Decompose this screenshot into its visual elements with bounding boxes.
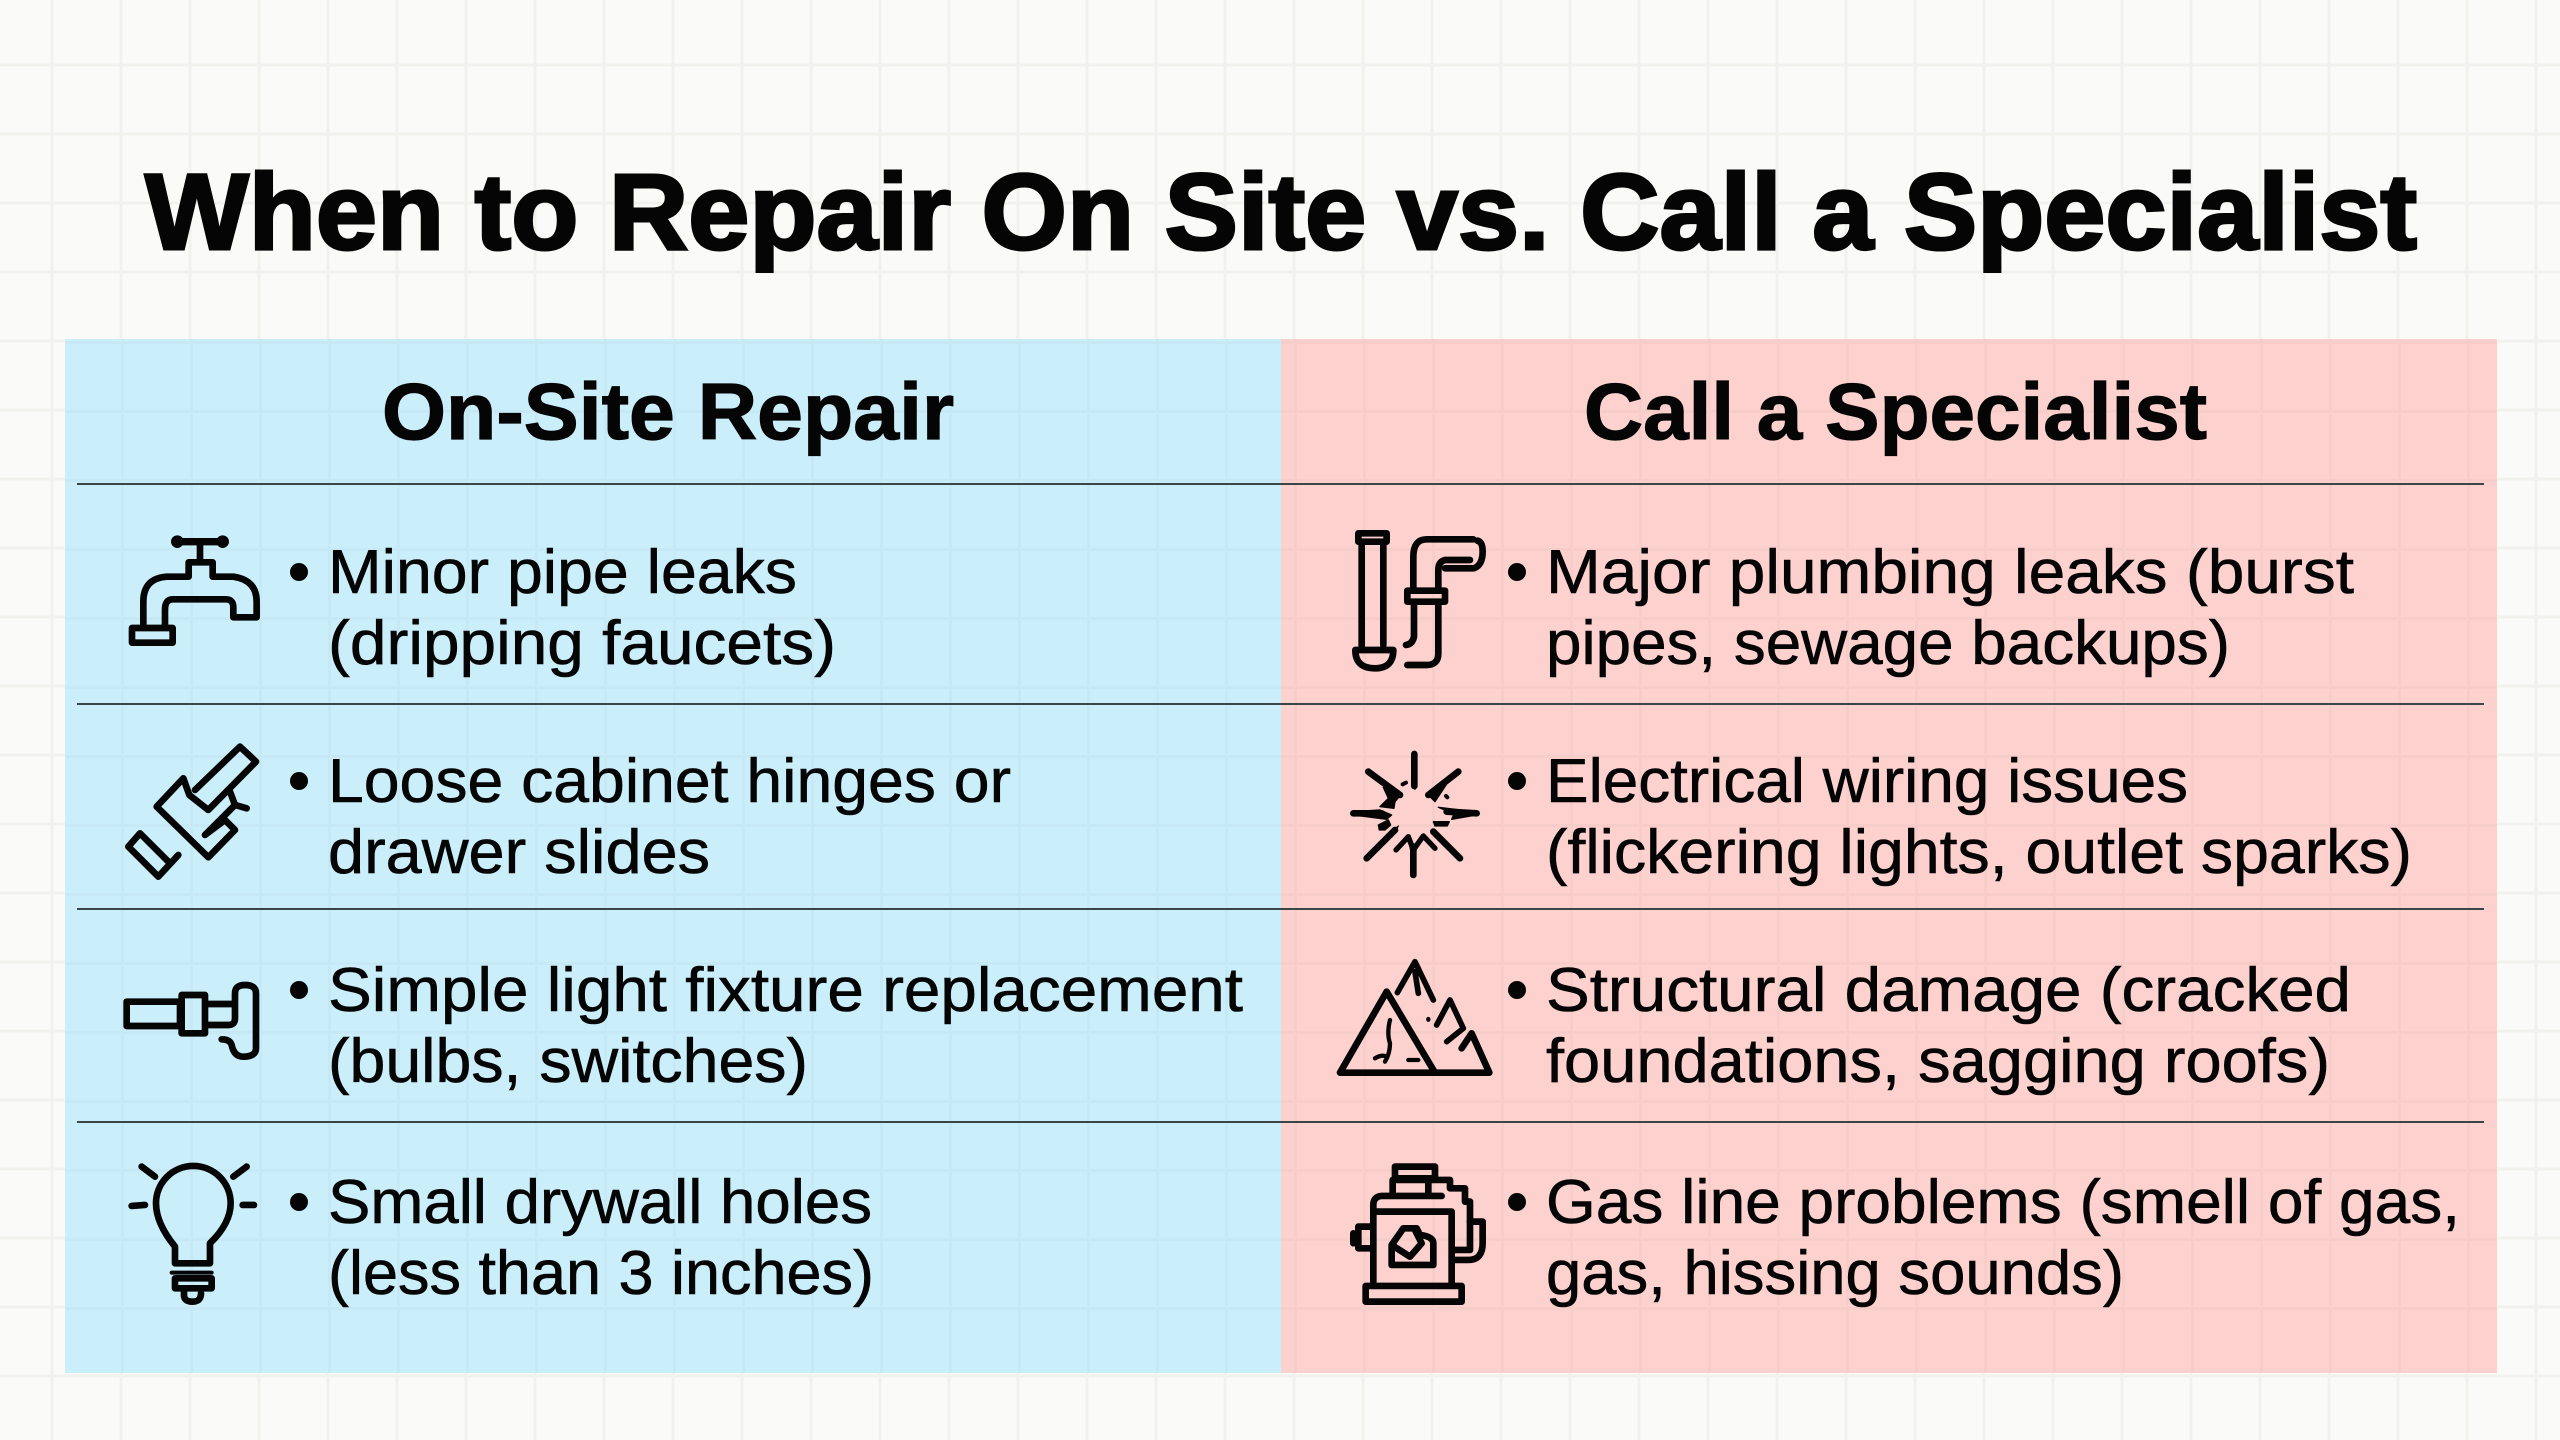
text block: right row 4 bbox=[1508, 1168, 2460, 1308]
text block: left row 2: Loose cabinet hinges or bbox=[328, 747, 1011, 816]
icon: light bulb bbox=[132, 1166, 254, 1302]
text block: right row 2: (flickering lights, outlet sparks) bbox=[1546, 818, 2412, 887]
text block: left row 1: Minor pipe leaks bbox=[328, 538, 797, 607]
heading: call a specialist: Call a Specialist bbox=[1584, 367, 2207, 456]
panel: on-site repair background bbox=[65, 339, 1281, 1373]
text block: left row 3: (bulbs, switches) bbox=[328, 1027, 808, 1096]
text block: right row 1: Major plumbing leaks (burst bbox=[1546, 538, 2354, 607]
text block: left row 2: drawer slides bbox=[328, 818, 710, 887]
row dividers bbox=[77, 484, 2484, 1122]
text block: right row 3: Structural damage (cracked bbox=[1546, 956, 2351, 1025]
text block: left row 1 bbox=[290, 538, 836, 678]
title: When to Repair On Site vs. Call a Specialist bbox=[145, 151, 2417, 272]
text block: left row 4: (less than 3 inches) bbox=[328, 1239, 874, 1308]
icon: cracked structure bbox=[1340, 962, 1489, 1073]
icon: light fixture bbox=[127, 985, 256, 1057]
heading: on-site repair: On-Site Repair bbox=[382, 367, 954, 456]
icon: pipes bbox=[1355, 533, 1483, 668]
panel: call a specialist background bbox=[1281, 339, 2497, 1373]
text block: left row 2 bbox=[290, 747, 1011, 887]
icon: wrench bbox=[128, 747, 256, 877]
text block: right row 2 bbox=[1508, 747, 2412, 887]
text block: right row 1: pipes, sewage backups) bbox=[1546, 609, 2230, 678]
text block: left row 4: Small drywall holes bbox=[328, 1168, 872, 1237]
text block: right row 1 bbox=[1508, 538, 2354, 678]
text block: left row 1: (dripping faucets) bbox=[328, 609, 836, 678]
text block: left row 3: Simple light fixture replacement bbox=[328, 956, 1243, 1025]
text block: left row 3 bbox=[290, 956, 1243, 1096]
text block: right row 4: gas, hissing sounds) bbox=[1546, 1239, 2124, 1308]
text block: right row 4: Gas line problems (smell of gas, bbox=[1546, 1168, 2460, 1237]
text block: right row 3: foundations, sagging roofs) bbox=[1546, 1027, 2330, 1096]
icon: gas meter bbox=[1353, 1167, 1483, 1302]
icon: faucet bbox=[132, 536, 257, 643]
text block: left row 4 bbox=[290, 1168, 874, 1308]
icon: electrical spark bbox=[1353, 754, 1477, 875]
text block: right row 2: Electrical wiring issues bbox=[1546, 747, 2188, 816]
text block: right row 3 bbox=[1508, 956, 2351, 1096]
